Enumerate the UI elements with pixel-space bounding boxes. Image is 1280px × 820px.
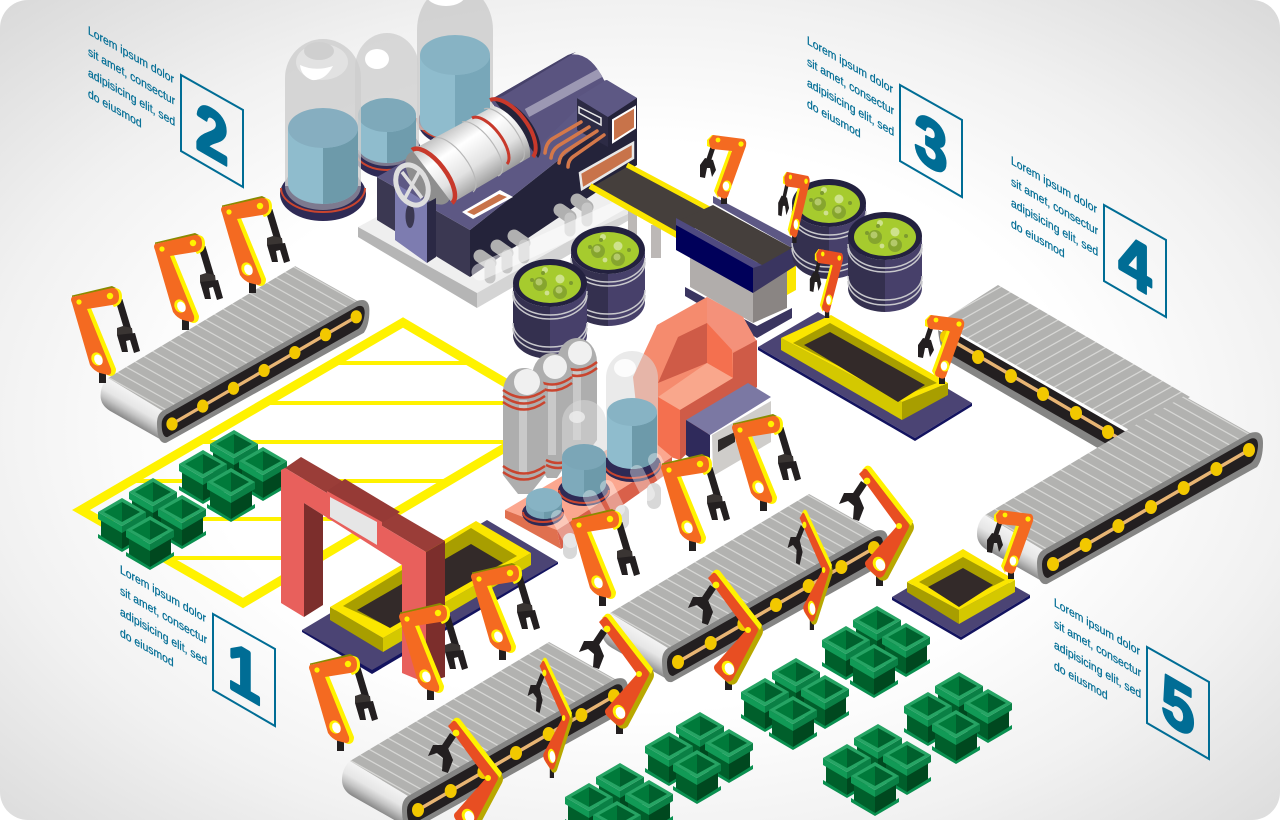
white roller cylinder <box>397 99 536 212</box>
robot arm beside barrels <box>778 172 810 243</box>
number box 4: 4 <box>1119 217 1152 312</box>
number box 1: 1 <box>228 626 260 720</box>
number box 3 <box>900 85 962 197</box>
tall glass tank <box>603 351 661 482</box>
info block 1 <box>120 562 275 726</box>
small glass tank <box>522 488 564 526</box>
caption 3: do eiusmod <box>807 96 861 141</box>
number box 2: 2 <box>196 87 228 181</box>
caption 2: adipisicing elit, sed <box>88 65 175 129</box>
caption 2: sit amet, consectur <box>88 44 175 108</box>
ink barrels <box>513 179 922 359</box>
grey gas cylinder 3 <box>557 338 597 460</box>
feed belt with yellow rails <box>590 165 715 248</box>
caption 3: adipisicing elit, sed <box>807 75 894 139</box>
robot arms over bottom conveyor <box>428 614 654 820</box>
caption 5: do eiusmod <box>1054 658 1108 703</box>
number box 5 <box>1147 647 1209 759</box>
caption 4: adipisicing elit, sed <box>1011 195 1098 259</box>
medium glass tank <box>558 400 610 506</box>
caption 1: Lorem ipsum dolor <box>120 562 206 626</box>
conveyor belt: middle <box>602 494 888 682</box>
tray with platform: upper right <box>758 312 972 441</box>
grey couplings on front face <box>480 200 587 263</box>
caption 4: do eiusmod <box>1011 216 1065 261</box>
L-shaped conveyor belt: right <box>938 285 1263 584</box>
station head <box>676 196 800 293</box>
purple press box <box>686 383 771 476</box>
info block 5 <box>1054 595 1209 759</box>
purple drum <box>490 52 605 158</box>
number box 3: 3 <box>915 97 947 191</box>
station stand <box>685 250 796 338</box>
number box 2 <box>181 75 243 187</box>
support legs <box>628 205 661 258</box>
info block 3 <box>807 33 962 197</box>
lower orange panel <box>580 143 633 189</box>
caption 5: sit amet, consectur <box>1054 616 1141 680</box>
centre plant <box>503 297 771 552</box>
robot arm over upper tray <box>810 249 843 318</box>
caption 3: sit amet, consectur <box>807 54 894 118</box>
crates lower right <box>565 606 1012 820</box>
robot arm over small tray <box>987 510 1033 579</box>
info block 2 <box>88 23 243 187</box>
orange panel on top <box>462 190 513 219</box>
caption 1: do eiusmod <box>120 625 174 670</box>
caption 2: Lorem ipsum dolor <box>88 23 174 87</box>
glass tank 2 <box>353 33 421 178</box>
number box 1 <box>213 614 275 726</box>
robot arms over middle conveyor <box>688 466 914 690</box>
salmon slab <box>505 430 672 549</box>
translucent pipe band <box>480 207 623 278</box>
glass tanks: top row <box>280 0 493 221</box>
number box 5: 5 <box>1162 659 1194 753</box>
robot arms: middle row <box>309 414 801 751</box>
robot arm above station <box>700 135 746 204</box>
machine base slab <box>358 140 650 308</box>
salmon press <box>633 297 757 460</box>
conveyor belt: top left <box>101 266 369 443</box>
caption 4: sit amet, consectur <box>1011 174 1098 238</box>
caption 1: sit amet, consectur <box>120 583 207 647</box>
caption 5: Lorem ipsum dolor <box>1054 595 1140 659</box>
caption 1: adipisicing elit, sed <box>120 604 207 668</box>
caption 5: adipisicing elit, sed <box>1054 637 1141 701</box>
hand wheel <box>390 160 434 210</box>
glass tank 1 <box>280 39 366 221</box>
transfer belt with station <box>590 165 800 338</box>
glass tank 3 <box>417 0 493 146</box>
tray with platform: lower left <box>302 520 558 674</box>
robot arm: right conveyor end <box>918 315 964 384</box>
lower belt section <box>977 396 1263 584</box>
copper pipes <box>545 122 604 167</box>
caption 2: do eiusmod <box>88 86 142 131</box>
main machine with cylinder <box>358 52 650 308</box>
red gate arch <box>281 457 445 683</box>
info block 4 <box>1011 153 1166 317</box>
grey gas cylinder 2 <box>532 353 572 478</box>
grey gas cylinder 1 <box>503 368 545 494</box>
caption 3: Lorem ipsum dolor <box>807 33 893 97</box>
small tray with platform <box>892 549 1030 640</box>
translucent connector tubes <box>558 460 666 552</box>
upper belt section <box>938 285 1190 454</box>
control box <box>577 80 637 147</box>
robot arms: top left row <box>71 196 290 383</box>
conveyor belt: bottom <box>342 642 628 820</box>
caption 4: Lorem ipsum dolor <box>1011 153 1097 217</box>
yellow floor marking <box>81 322 560 603</box>
number box 4 <box>1104 205 1166 317</box>
crates on floor marking <box>98 430 287 570</box>
machine body <box>377 80 637 277</box>
wheel bracket <box>395 183 436 263</box>
